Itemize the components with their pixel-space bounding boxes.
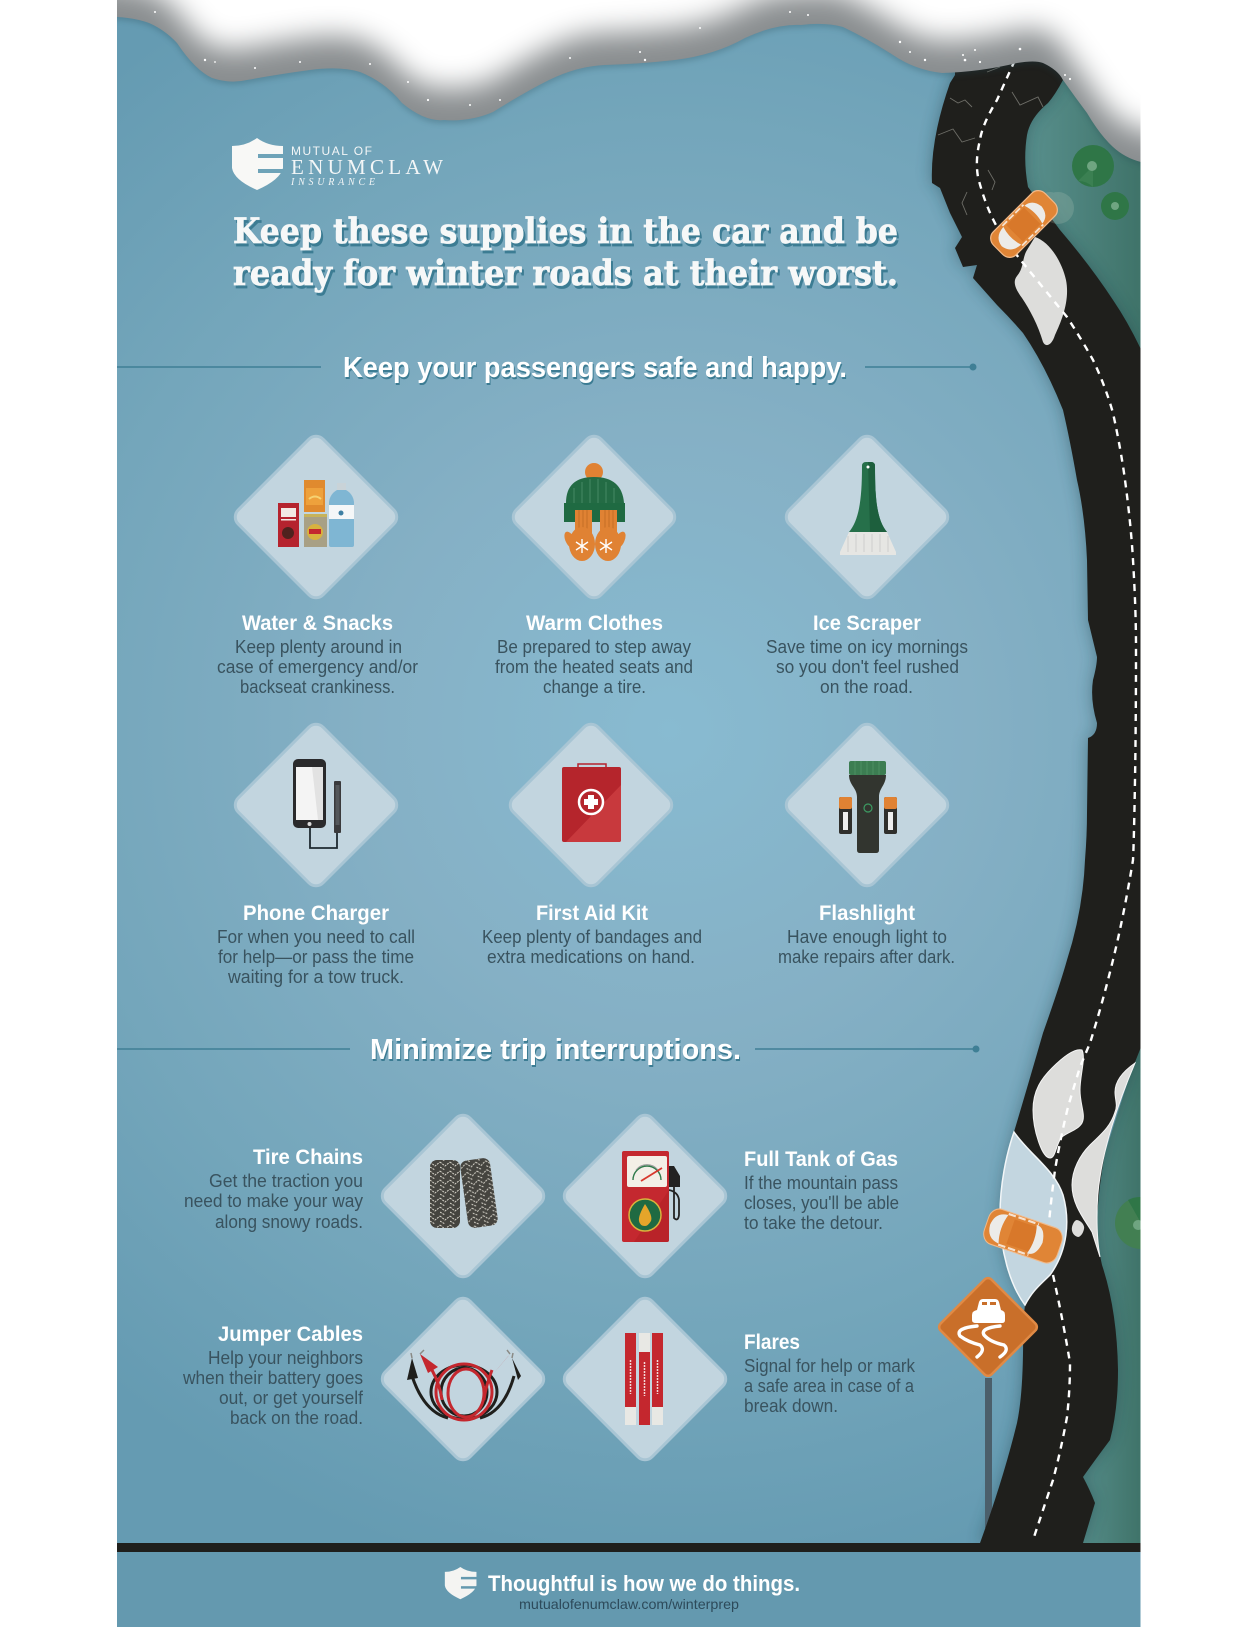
description — [744, 1356, 916, 1416]
description — [217, 637, 418, 697]
car: bottom — [983, 1208, 1063, 1264]
icon: hat and mittens — [562, 463, 628, 561]
description: case of emergency and/or — [217, 657, 418, 677]
description: to take the detour. — [744, 1213, 883, 1233]
description: from the heated seats and — [495, 657, 693, 677]
description — [217, 927, 415, 987]
item: tire chains — [184, 1111, 548, 1281]
description: closes, you'll be able — [744, 1193, 899, 1213]
footer band — [117, 1552, 1140, 1627]
item: flares — [560, 1294, 916, 1464]
icon: gas pump — [622, 1151, 680, 1242]
label: Flashlight — [819, 902, 915, 925]
icon: jumper cables — [407, 1350, 521, 1420]
section heading: trip interruptions: Minimize trip interruptions. — [370, 1034, 741, 1066]
description: waiting for a tow truck. — [227, 967, 404, 987]
diamond — [782, 432, 952, 602]
icon: snacks and water bottle — [278, 480, 354, 547]
title: Keep these supplies in the car and be — [233, 211, 898, 252]
slippery road sign — [937, 1276, 1039, 1378]
description: Help your neighbors — [208, 1348, 363, 1368]
label: Jumper Cables — [218, 1323, 363, 1346]
item: phone charger — [217, 720, 415, 987]
description — [482, 927, 702, 967]
description: If the mountain pass — [744, 1173, 898, 1193]
logo — [232, 138, 443, 190]
description: Be prepared to step away — [497, 637, 691, 657]
description: back on the road. — [230, 1408, 363, 1428]
road — [932, 40, 1145, 1543]
description: Have enough light to — [787, 927, 947, 947]
item: warm clothes — [495, 432, 693, 697]
description: Signal for help or mark — [744, 1356, 916, 1376]
icon: ice scraper — [840, 462, 896, 555]
diamond — [560, 1294, 730, 1464]
description: when their battery goes — [182, 1368, 363, 1388]
logo wordmark: INSURANCE — [290, 177, 375, 188]
section heading: trip interruptions — [117, 1034, 980, 1066]
light blue ice sheet — [1000, 1132, 1067, 1305]
description: Keep plenty of bandages and — [482, 927, 702, 947]
item: full tank of gas — [560, 1111, 899, 1281]
diamond — [231, 720, 401, 890]
road shadow — [932, 40, 1145, 1543]
description: for help—or pass the time — [218, 947, 414, 967]
label: Tire Chains — [253, 1146, 363, 1169]
diamond — [509, 432, 679, 602]
label: Ice Scraper — [813, 612, 921, 635]
snow patch right — [1072, 1063, 1135, 1257]
tree lower — [1115, 1197, 1140, 1249]
label: First Aid Kit — [536, 902, 648, 925]
item: jumper cables — [182, 1294, 548, 1464]
section heading: passengers: Keep your passengers safe and happy. — [343, 352, 847, 384]
tree small — [1101, 192, 1129, 220]
section heading: passengers — [117, 352, 976, 384]
description: For when you need to call — [217, 927, 415, 947]
snow specks — [154, 11, 1071, 106]
snow patch large — [1033, 1050, 1083, 1158]
description: a safe area in case of a — [744, 1376, 915, 1396]
description: Keep plenty around in — [235, 637, 402, 657]
description: along snowy roads. — [215, 1212, 363, 1232]
description: change a tire. — [543, 677, 646, 697]
description — [744, 1173, 899, 1233]
item: first aid kit — [482, 720, 702, 967]
icon: tire chains — [430, 1157, 499, 1229]
label: Full Tank of Gas — [744, 1148, 898, 1171]
description: need to make your way — [184, 1191, 363, 1211]
title — [233, 211, 898, 294]
diamond — [560, 1111, 730, 1281]
small snow patch — [1072, 1220, 1084, 1237]
sign pole — [985, 1378, 992, 1528]
label: Water & Snacks — [242, 612, 393, 635]
description — [182, 1348, 364, 1428]
description: extra medications on hand. — [487, 947, 695, 967]
tagline: Thoughtful is how we do things. — [488, 1571, 800, 1596]
diamond — [506, 720, 676, 890]
item: ice scraper — [766, 432, 968, 697]
footer — [117, 1543, 1140, 1627]
description: on the road. — [820, 677, 913, 697]
item: water and snacks — [217, 432, 418, 697]
label: Phone Charger — [243, 902, 389, 925]
car: top — [990, 190, 1058, 258]
logo wordmark: ENUMCLAW — [291, 155, 443, 179]
footer shield — [445, 1567, 477, 1599]
snow patch upper — [1015, 237, 1067, 345]
headlight glow — [1046, 192, 1074, 224]
road centre line — [977, 60, 1136, 1540]
description: break down. — [744, 1396, 838, 1416]
roadside teal ground — [1020, 55, 1141, 1543]
description: so you don't feel rushed — [776, 657, 959, 677]
item: flashlight — [778, 720, 955, 967]
label: Flares — [744, 1331, 800, 1354]
description — [184, 1171, 363, 1232]
description — [778, 927, 955, 967]
diamond — [231, 432, 401, 602]
icon: flashlight and batteries — [839, 761, 897, 853]
description: Save time on icy mornings — [766, 637, 968, 657]
icon: flares — [625, 1333, 663, 1425]
logo wordmark: MUTUAL OF — [291, 144, 372, 158]
description — [766, 637, 968, 697]
diamond — [378, 1294, 548, 1464]
road cracks — [938, 67, 1043, 215]
description — [495, 637, 693, 697]
logo wordmark — [290, 144, 443, 188]
description: make repairs after dark. — [778, 947, 955, 967]
url: mutualofenumclaw.com/winterprep — [519, 1596, 739, 1612]
description: Get the traction you — [209, 1171, 363, 1191]
title: ready for winter roads at their worst. — [233, 253, 898, 294]
label: Warm Clothes — [526, 612, 663, 635]
black road bar — [117, 1543, 1140, 1552]
diamond — [378, 1111, 548, 1281]
description: out, or get yourself — [219, 1388, 364, 1408]
diamond — [782, 720, 952, 890]
logo shield — [232, 138, 284, 190]
description: backseat crankiness. — [240, 677, 395, 697]
snow cap — [117, 0, 1140, 164]
icon: first aid kit — [562, 764, 621, 842]
icon: phone and power bank — [293, 759, 341, 848]
tree top — [1072, 145, 1114, 187]
